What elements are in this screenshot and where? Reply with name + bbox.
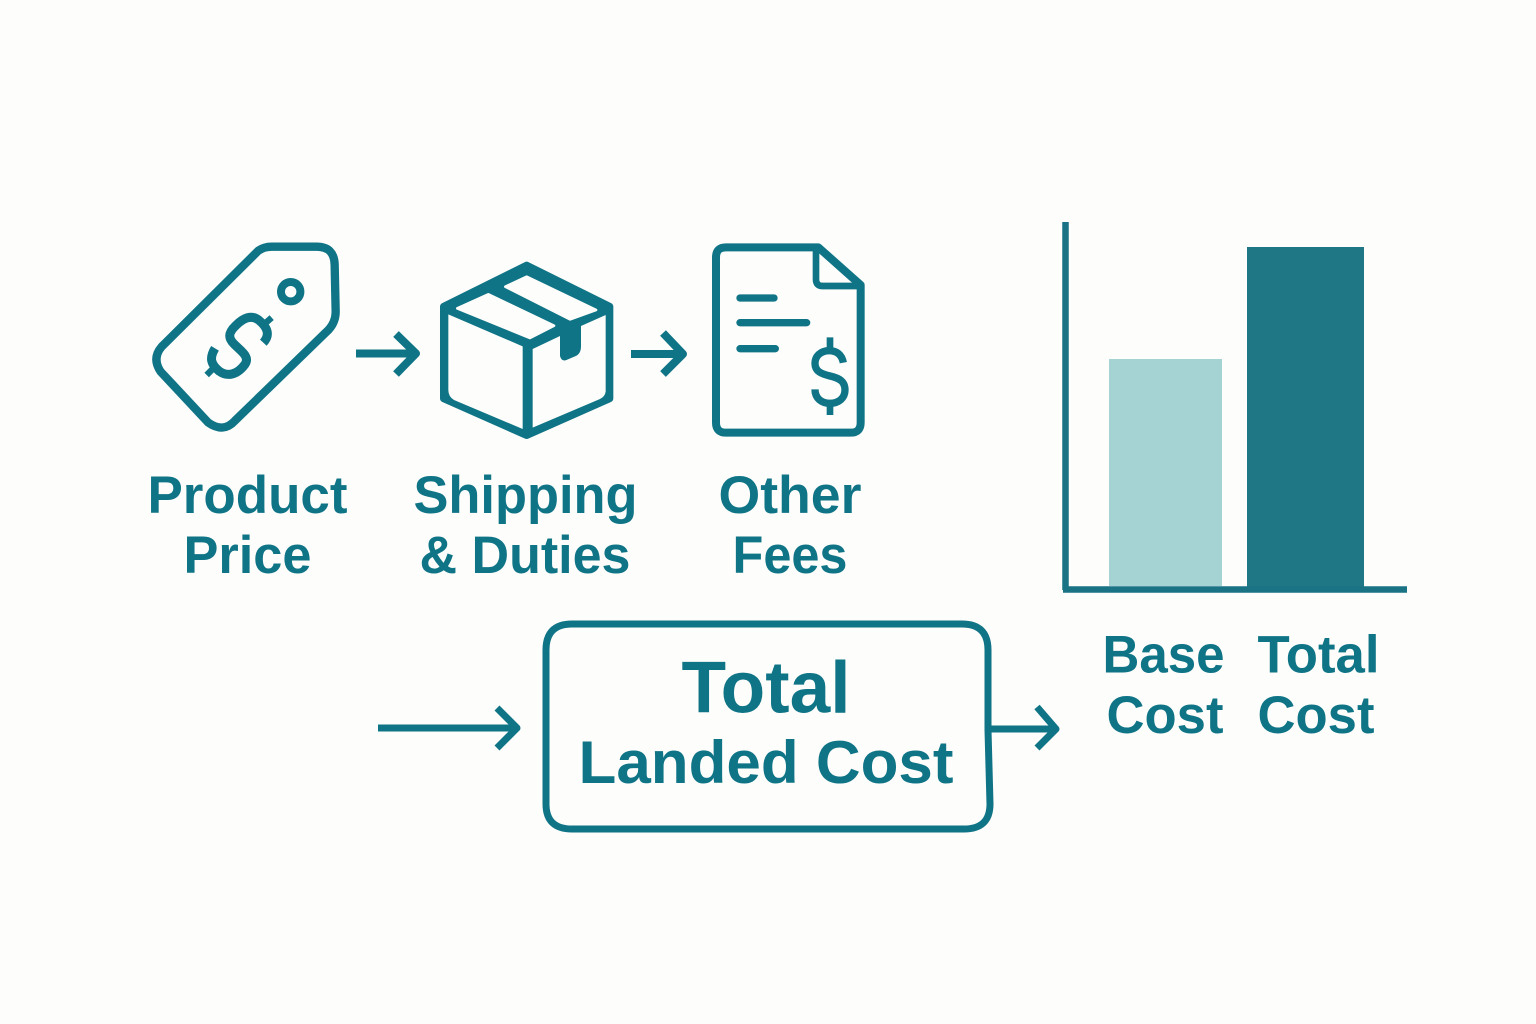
icon: shipping box	[444, 266, 609, 435]
arrow: fees into total landed cost	[378, 708, 517, 748]
label: total cost	[1258, 626, 1380, 745]
heading: total: Total	[682, 648, 850, 728]
arrow: tag to box	[356, 334, 416, 374]
label: shipping and duties: Shipping	[414, 466, 638, 525]
icon: fee document	[716, 247, 861, 433]
label: base cost	[1102, 626, 1224, 745]
label: other fees: Fees	[732, 526, 848, 585]
label: product price: Product	[148, 466, 348, 525]
text: landed cost: Landed Cost	[578, 729, 954, 796]
label: product price: Price	[184, 526, 312, 585]
bar chart	[1063, 222, 1407, 590]
label: total cost: Total	[1258, 626, 1380, 684]
icon: price tag	[156, 247, 336, 428]
callout: total landed cost	[546, 624, 990, 829]
label: other fees	[718, 466, 862, 585]
arrow: total landed cost to chart	[990, 707, 1056, 748]
bar: base cost	[1109, 359, 1222, 586]
chart axes	[1063, 222, 1407, 590]
label: base cost: Cost	[1106, 686, 1224, 745]
bar: total cost	[1247, 247, 1364, 587]
label: other fees: Other	[718, 466, 862, 525]
label: product price	[148, 466, 348, 585]
label: total cost: Cost	[1258, 686, 1374, 745]
arrow: box to document	[631, 333, 683, 374]
label: base cost: Base	[1102, 626, 1224, 684]
label: shipping and duties	[414, 466, 638, 585]
label: shipping and duties: & Duties	[420, 526, 630, 585]
